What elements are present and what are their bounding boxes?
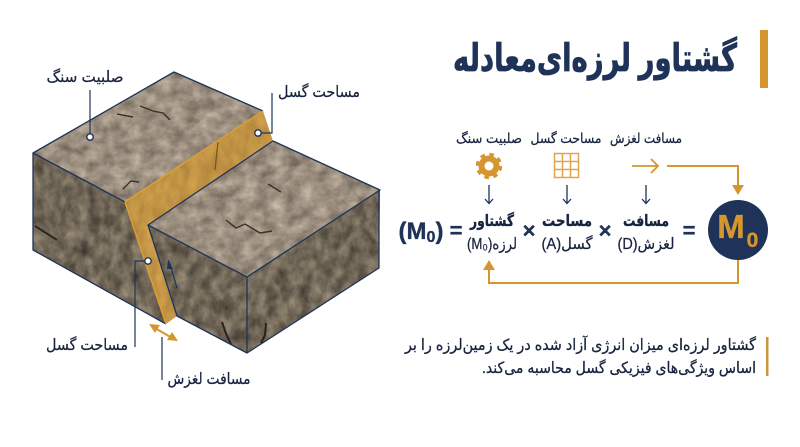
term: slip: لغزش(D)	[618, 236, 674, 253]
symbol M0: (M	[399, 218, 427, 245]
fault plane edge highlight	[125, 111, 263, 324]
callout: fault area top: مساحت گسل	[278, 83, 360, 101]
equals sign: =	[683, 218, 695, 243]
description text	[404, 335, 757, 378]
description accent bar	[766, 337, 768, 376]
arrow: rigidity down	[485, 185, 493, 204]
arrow: slip distance double arrow	[149, 324, 178, 341]
left block front face	[34, 154, 165, 322]
block outlines	[33, 72, 380, 353]
term: area: گسل(A)	[542, 235, 593, 253]
callout: slip distance	[162, 337, 250, 388]
left block top surface	[30, 70, 270, 205]
icon: slip arrow	[632, 159, 658, 173]
arrow: area down	[563, 185, 571, 204]
term: slip: مسافت	[623, 213, 669, 230]
right block front face	[149, 226, 246, 352]
symbol M0: 0	[427, 229, 436, 246]
term: area: مساحت	[542, 213, 592, 230]
callout: fault area top	[255, 83, 360, 136]
term: moment: گشتاور	[469, 211, 515, 230]
description text: گشتاور لرزه‌ای میزان انرژی آزاد شده در یک زمین‌لرزه را بر	[404, 335, 757, 355]
callout: rock rigidity: صلبیت سنگ	[46, 68, 124, 86]
callout: slip distance: مسافت لغزش	[168, 371, 250, 388]
arrow: slip down	[642, 185, 650, 204]
term: slip	[618, 213, 674, 253]
icon: grid	[554, 154, 578, 178]
top label: fault area: مساحت گسل	[530, 130, 602, 146]
right block side face	[245, 188, 382, 355]
M0 circle	[708, 200, 768, 260]
top label: slip distance: مسافت لغزش	[610, 131, 682, 147]
callout: fault area bottom: مساحت گسل	[46, 336, 128, 354]
equation diagram	[399, 130, 768, 283]
times sign: ×	[523, 218, 535, 243]
arrow: circle back to moment	[483, 260, 738, 283]
title accent bar	[760, 30, 768, 88]
symbol M0: )	[435, 218, 443, 245]
term: moment: لرزه(M₀)	[467, 236, 517, 253]
icon: gear	[478, 155, 500, 177]
term: moment	[467, 211, 517, 253]
slip arrow on fault	[167, 259, 177, 288]
illustration: fault block	[30, 70, 382, 355]
callout: rock rigidity	[46, 68, 124, 140]
times sign: ×	[599, 218, 611, 243]
callout: fault area bottom	[46, 258, 151, 354]
right block top surface	[146, 139, 382, 279]
arrow: to circle	[667, 166, 744, 195]
description text: اساس ویژگی‌های فیزیکی گسل محاسبه می‌کند.	[482, 359, 756, 378]
term: area	[542, 213, 593, 253]
fault plane	[122, 108, 276, 328]
M0 circle: M	[717, 208, 745, 245]
top label: rock rigidity: صلبیت سنگ	[456, 131, 522, 146]
equals sign: =	[450, 218, 462, 243]
M0 circle: 0	[747, 229, 758, 252]
